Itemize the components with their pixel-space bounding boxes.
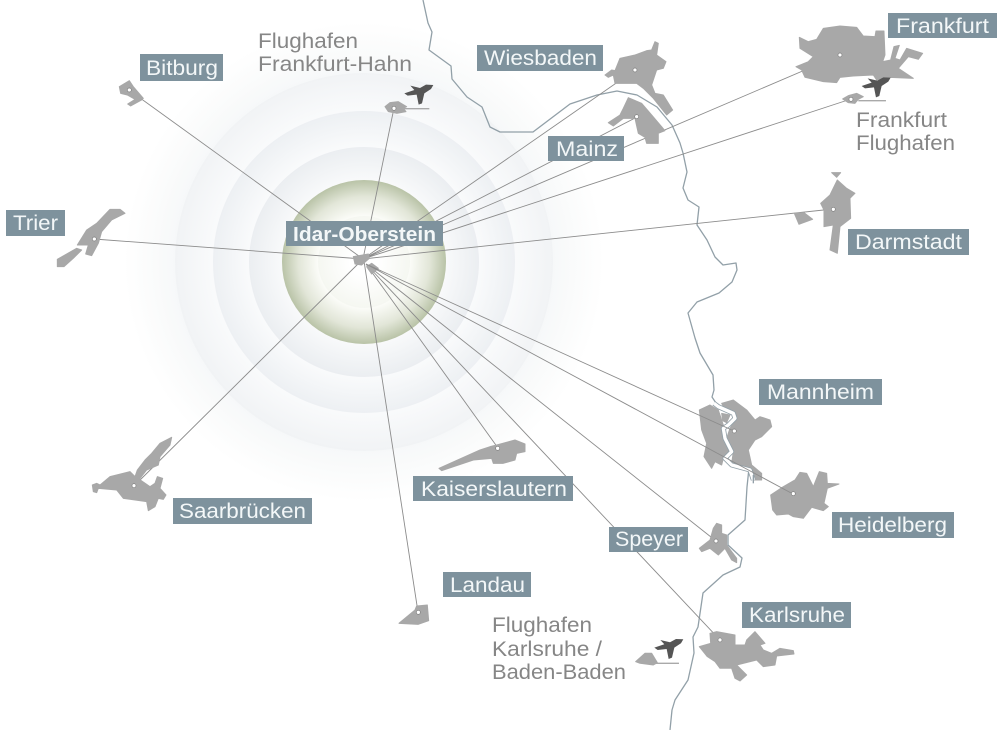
label: Landau: Landau	[450, 574, 525, 597]
city: Flughafen Frankfurt-Hahn	[385, 85, 433, 113]
label: Mainz: Mainz	[556, 138, 618, 161]
icon: plane Frankfurt	[858, 77, 891, 101]
city: Mannheim	[699, 400, 772, 483]
concentric radius circles	[124, 22, 604, 502]
label: Bitburg: Bitburg	[146, 57, 218, 80]
label: Darmstadt: Darmstadt	[855, 231, 962, 254]
text: Flughafen Karlsruhe / Baden-Baden: Karlsruhe /	[492, 638, 602, 661]
label: Idar-Oberstein: Idar-Oberstein	[293, 224, 436, 246]
city: Saarbrücken	[92, 437, 172, 511]
connection lines: Mannheim and Heidelberg	[366, 264, 793, 494]
label: Speyer: Speyer	[615, 528, 683, 551]
label: Mainz	[548, 136, 624, 161]
city: Landau	[399, 605, 429, 624]
city: Heidelberg	[771, 472, 839, 518]
city: Idar-Oberstein	[353, 254, 378, 274]
text: Flughafen Karlsruhe / Baden-Baden	[492, 614, 626, 684]
text: Frankfurt Flughafen: Flughafen	[856, 132, 955, 155]
label: Saarbrücken: Saarbrücken	[179, 500, 306, 523]
city: Trier	[57, 209, 125, 267]
label: Mannheim: Mannheim	[767, 381, 874, 404]
city: Karlsruhe	[699, 632, 794, 681]
city: Speyer	[699, 523, 737, 563]
river and border line	[423, 0, 749, 730]
text: Frankfurt Flughafen	[856, 109, 955, 155]
text: Flughafen Karlsruhe / Baden-Baden: Flughafen	[492, 614, 592, 637]
label: Karlsruhe: Karlsruhe	[749, 604, 845, 627]
city: Bitburg	[119, 81, 143, 106]
connection lines	[94, 55, 851, 640]
text: Flughafen Frankfurt-Hahn: Frankfurt-Hahn	[258, 53, 412, 76]
label: Frankfurt: Frankfurt	[896, 15, 989, 38]
label: Heidelberg: Heidelberg	[838, 514, 947, 537]
label: Wiesbaden: Wiesbaden	[484, 47, 597, 70]
city: Frankfurt, airport and Darmstadt	[794, 26, 923, 253]
marker dots: Mannheim and Heidelberg	[732, 429, 795, 496]
icon: airport Karlsruhe / Baden-Baden	[636, 639, 683, 665]
label: Trier: Trier	[13, 212, 58, 235]
label: Trier	[6, 210, 65, 236]
text: Flughafen Frankfurt-Hahn	[258, 30, 412, 76]
text: Frankfurt Flughafen: Frankfurt	[856, 109, 947, 132]
label: Kaiserslautern: Kaiserslautern	[421, 478, 567, 501]
text: Flughafen Karlsruhe / Baden-Baden: Baden-Baden	[492, 661, 626, 684]
text: Flughafen Frankfurt-Hahn: Flughafen	[258, 30, 358, 53]
label: Bitburg	[140, 54, 223, 81]
city: Kaiserslautern	[439, 440, 525, 471]
city: Wiesbaden and Mainz	[605, 42, 673, 143]
